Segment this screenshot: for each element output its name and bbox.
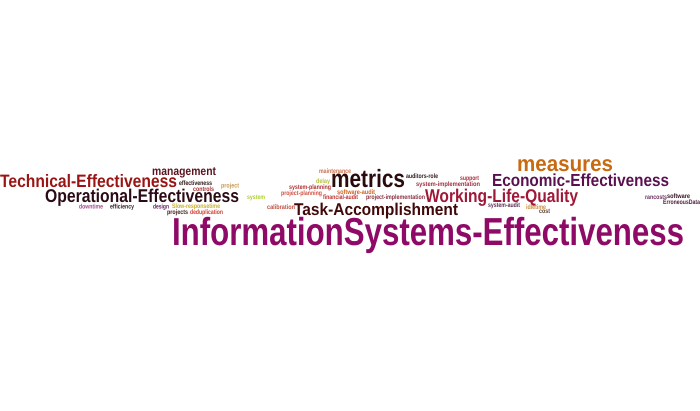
- word: controls: controls: [193, 186, 214, 193]
- word: auditors-role: auditors-role: [406, 173, 438, 180]
- word: efficiency: efficiency: [110, 204, 134, 210]
- word: financial-audit: financial-audit: [323, 194, 359, 201]
- word: Operational-Effectiveness: Operational-Effectiveness: [45, 185, 239, 206]
- word: measures: measures: [517, 151, 613, 176]
- word: management: management: [152, 164, 216, 178]
- word: project-planning: project-planning: [281, 190, 322, 197]
- word: downtime: downtime: [79, 204, 103, 210]
- word: rancosts: rancosts: [645, 194, 667, 201]
- word: system-implementation: system-implementation: [416, 181, 480, 188]
- word: idletime: idletime: [526, 204, 546, 211]
- word: metrics: metrics: [331, 165, 405, 193]
- word: system-audit: system-audit: [488, 202, 521, 209]
- word: project-implementation: project-implementation: [366, 194, 425, 201]
- word: project: project: [221, 182, 240, 190]
- word: effectiveness: effectiveness: [179, 180, 212, 187]
- word: design: design: [153, 204, 169, 210]
- word: Technical-Effectiveness: Technical-Effectiveness: [0, 171, 177, 191]
- word: calibration: calibration: [267, 204, 295, 211]
- word: deduplication: deduplication: [190, 209, 223, 216]
- word: Slow-responsetime: Slow-responsetime: [172, 203, 220, 210]
- word: software: software: [667, 193, 690, 200]
- word: system-planning: system-planning: [289, 184, 331, 191]
- word: software-audit: software-audit: [337, 189, 376, 196]
- word: system: system: [247, 194, 265, 201]
- word: maintenance: maintenance: [319, 168, 351, 175]
- word: Working-Life-Quality: Working-Life-Quality: [425, 185, 579, 206]
- word: delay: delay: [316, 178, 330, 185]
- word: cost: cost: [539, 208, 551, 215]
- word: Task-Accomplishment: Task-Accomplishment: [294, 200, 458, 219]
- word: support: support: [460, 175, 480, 182]
- word: projects: projects: [167, 209, 188, 216]
- word: Economic-Effectiveness: Economic-Effectiveness: [492, 170, 669, 190]
